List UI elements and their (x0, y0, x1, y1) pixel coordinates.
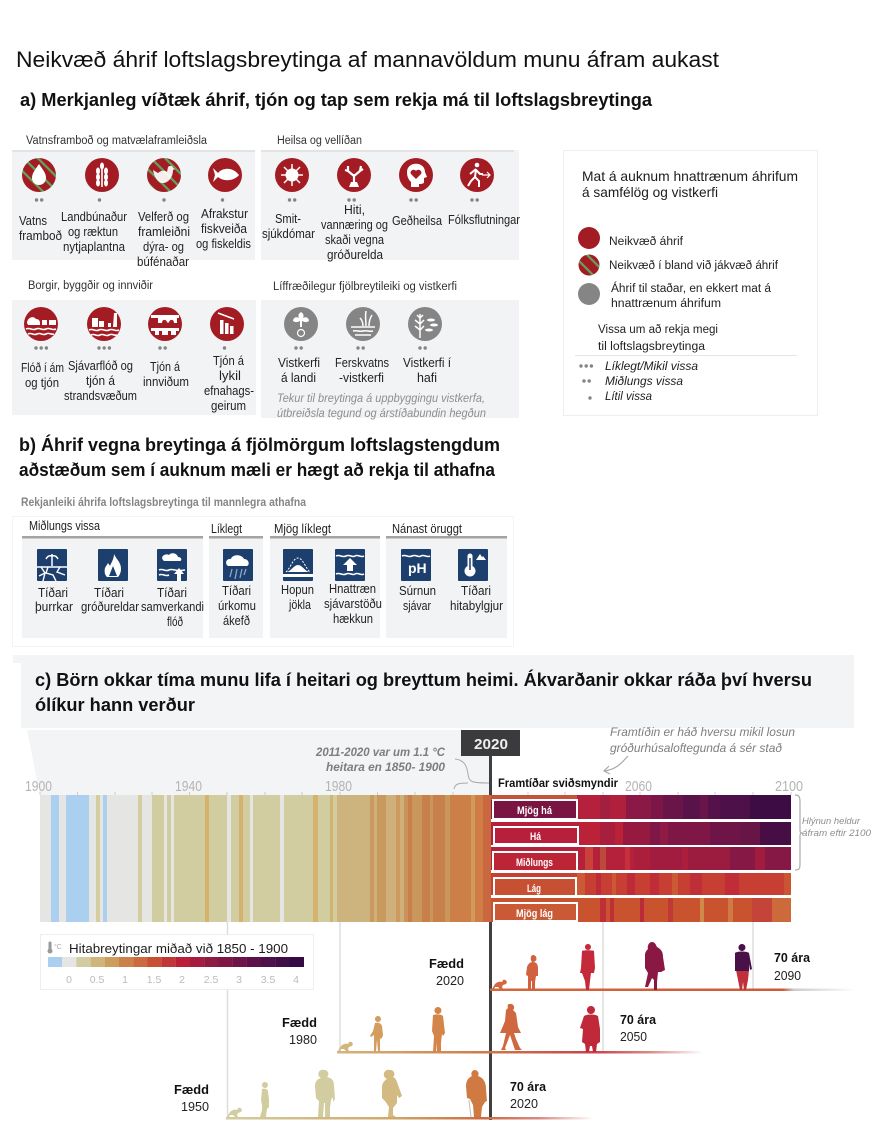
heading: water and food: Vatnsframboð og matvælaframleiðsla (26, 135, 208, 147)
item: agriculture (61, 158, 127, 254)
item: water availability: Vatns (19, 214, 47, 228)
annotation: 2011-2020 warming: heitara en 1850- 1900 (326, 760, 445, 774)
annotation: warming continues after 2100: áfram eftir 2100 (802, 828, 872, 839)
timeline: born 1980 (282, 1004, 704, 1054)
group: likely (209, 522, 263, 638)
backdrop: historical wedge (27, 730, 491, 795)
heading: biodiversity: Líffræðilegur fjölbreytileiki og vistkerfi (273, 281, 457, 293)
item: economic sectors (204, 307, 254, 413)
item: land ecosystems (278, 307, 320, 385)
group: medium confidence: Miðlungs vissa (29, 519, 100, 533)
legend: confidence heading: Vissa um að rekja megi (598, 324, 718, 336)
legend: temperature colour scale (40, 934, 314, 990)
item: infectious disease (262, 158, 315, 241)
item: infrastructure: innviðum (143, 375, 189, 389)
group: virtually certain (386, 522, 507, 638)
heading: health: Heilsa og vellíðan (277, 135, 362, 147)
scale values (66, 974, 299, 986)
annotation: future depends on emissions: gróðurhúsaloftegunda á sér stað (610, 741, 782, 755)
scale values: 1 (122, 974, 128, 986)
item: heatwaves (450, 549, 503, 613)
heading: future scenarios: Framtíðar sviðsmyndir (498, 776, 618, 790)
item: heavy rain: úrkomu (218, 599, 256, 613)
item: heat, malnutrition: gróðurelda (327, 248, 383, 262)
axis years (25, 778, 803, 795)
panel: legend of impacts (564, 150, 818, 416)
item: economic sectors: efnahags- (204, 384, 254, 398)
item: heatwaves: hitabylgjur (450, 599, 503, 613)
item: heavy rain: Tíðari (222, 584, 251, 598)
scale values: 2 (179, 974, 185, 986)
label: born 1980: 1980 (289, 1032, 317, 1047)
scenario label: high: Há (530, 831, 542, 843)
legend: confidence levels (581, 361, 698, 403)
legend title: á samfélög og vistkerfi (582, 184, 718, 200)
group: medium confidence (22, 519, 204, 638)
panel: health and wellbeing (261, 135, 520, 262)
row: intermediate (491, 847, 791, 870)
item: infectious disease: Smit- (275, 212, 301, 226)
item: mental health: Geðheilsa (392, 214, 442, 228)
people: born 1980 (338, 1004, 600, 1052)
item: freshwater ecosystems: -vistkerfi (339, 371, 384, 385)
2020 marker: 2020 (474, 736, 508, 753)
scale values: 3.5 (261, 974, 275, 986)
axis years: 1900 (25, 778, 52, 795)
item: ocean ecosystems (403, 307, 451, 385)
item: mental health (392, 158, 442, 228)
item: water availability: framboð (19, 229, 62, 243)
item: ocean ecosystems: Vistkerfi í (403, 356, 451, 370)
item: fisheries: Afrakstur (201, 207, 248, 221)
chart: future scenario stripes (491, 795, 791, 922)
legend: no assessment: hnattrænum áhrifum (611, 298, 721, 310)
item: land ecosystems: Vistkerfi (278, 356, 320, 370)
legend: mixed (578, 254, 779, 276)
label: 70 in 2020 (510, 1079, 547, 1111)
scenario label: very low: Mjög lág (516, 908, 553, 920)
note: ecosystem changes: útbreiðsla tegund og árstíðabundin hegðun (277, 406, 486, 420)
legend: negative (578, 227, 684, 249)
scale values: 2.5 (204, 974, 218, 986)
label: born 2020: Fædd (429, 956, 464, 971)
legend title: Mat á auknum hnattrænum áhrifum (582, 168, 798, 184)
annotation: future depends on emissions (604, 725, 795, 774)
label: 70 in 2050: 70 ára (620, 1012, 657, 1027)
icon: thermometer: °C (54, 943, 62, 951)
scenario label: very high: Mjög há (517, 805, 553, 817)
item: compound floods: flóð (167, 615, 183, 629)
item: droughts: þurrkar (35, 600, 73, 614)
item: river flood: og tjón (25, 376, 59, 390)
item: wildfires: Tíðari (94, 586, 124, 600)
label: born 1950 (174, 1082, 209, 1114)
item: economic sectors: geirum (211, 399, 246, 413)
item: heavy rain (218, 549, 256, 628)
item: coastal flood: Sjávarflóð og (68, 359, 133, 373)
item: river flood: Flóð í ám (21, 361, 64, 375)
panel: water and food (12, 135, 255, 269)
scenario label: high (494, 827, 578, 844)
item: animal welfare: dýra- og (143, 240, 184, 254)
panel: cities and infrastructure (12, 280, 256, 415)
note: ecosystem changes: Tekur til breytinga á uppbyggingu vistkerfa, (277, 391, 485, 405)
scenario label: low (494, 878, 576, 896)
annotation: 2011-2020 warming: 2011-2020 var um 1.1 °C (315, 745, 445, 759)
people: born 2020 (492, 942, 752, 990)
group: very likely: Mjög líklegt (274, 522, 331, 536)
group: very likely (270, 522, 382, 638)
heading: section b (19, 434, 500, 480)
title: Neikvæð áhrif loftslagsbreytinga af mannavöldum munu áfram aukast (16, 47, 719, 72)
heading: cities: Borgir, byggðir og innviðir (28, 280, 153, 292)
scenario label: intermediate (493, 852, 577, 871)
panel: biodiversity and ecosystems (261, 281, 519, 420)
item: compound floods: samverkandi (141, 600, 204, 614)
item: animal welfare: búfénaðar (137, 255, 189, 269)
item: river flood (21, 307, 64, 390)
item: droughts: Tíðari (38, 586, 68, 600)
item: ocean acidification (399, 549, 436, 613)
item: fisheries: fiskveiða (201, 222, 247, 236)
item: animal welfare (137, 158, 190, 269)
panel: section c heading: ólíkur hann verður (35, 694, 195, 715)
scenario label: intermediate: Miðlungs (516, 857, 553, 869)
label: 70 in 2050 (620, 1012, 657, 1044)
item: ocean acidification: sjávar (403, 599, 431, 613)
item: ocean acidification: Súrnun (399, 584, 436, 598)
item: migration (448, 158, 520, 227)
item: coastal flood: strandsvæðum (64, 389, 137, 403)
annotation: warming continues after 2100: Hlýnun heldur (802, 816, 861, 827)
item: ocean ecosystems: hafi (417, 371, 437, 385)
legend: confidence heading: til loftslagsbreytinga (598, 341, 706, 353)
scale values: 0.5 (90, 974, 104, 986)
scenario label: low: Lág (527, 883, 541, 895)
panel: section c heading: c) Börn okkar tíma munu lifa í heitari og breyttum heimi. Ákvarðanir okkar ráða því hversu (35, 669, 812, 690)
item: compound floods (141, 549, 204, 629)
2020 marker (461, 730, 520, 1120)
subheading: attribution: Rekjanleiki áhrifa loftslagsbreytinga til mannlegra athafna (21, 497, 307, 509)
item: droughts (35, 549, 73, 614)
row: low (491, 873, 791, 895)
group: virtually certain: Nánast öruggt (392, 522, 462, 536)
item: coastal flood: tjón á (86, 374, 115, 388)
item: wildfires (81, 549, 139, 614)
heading: section a: a) Merkjanleg víðtæk áhrif, tjón og tap sem rekja má til loftslagsbreytinga (20, 89, 653, 110)
annotation: future depends on emissions: Framtíðin er háð hversu mikil losun (610, 725, 795, 739)
legend: negative: Neikvæð áhrif (609, 236, 684, 248)
scale values: 3 (236, 974, 242, 986)
item: compound floods: Tíðari (157, 586, 187, 600)
axis years: 2100 (775, 778, 803, 795)
item: agriculture: nytjaplantna (63, 240, 125, 254)
chart: warming stripes 1900-2020 (40, 795, 491, 922)
note: ecosystem changes (277, 391, 486, 420)
annotation: warming continues after 2100 (795, 795, 872, 870)
legend: confidence levels: Lítil vissa (605, 391, 652, 403)
scenario label: very high (493, 800, 577, 819)
panel: section c heading (13, 655, 854, 728)
item: ocean acidification: pH (408, 560, 427, 576)
axis years: 2060 (625, 778, 652, 795)
item: agriculture: Landbúnaður (61, 210, 127, 224)
item: fisheries (196, 158, 251, 251)
item: glacier retreat (281, 549, 314, 612)
timeline: born 2020 (429, 942, 856, 991)
legend: confidence heading (598, 324, 718, 353)
colour bar (48, 957, 304, 967)
legend: mixed: Neikvæð í bland við jákvæð áhrif (609, 260, 779, 272)
label: 70 in 2050: 2050 (620, 1029, 647, 1044)
label: born 1980 (282, 1015, 317, 1047)
item: economic sectors: lykil (219, 369, 241, 383)
axis years: 1980 (325, 778, 352, 795)
item: coastal flood (64, 307, 137, 403)
item: agriculture: og ræktun (68, 225, 118, 239)
icon: thermometer (48, 943, 62, 954)
annotation: 2011-2020 warming (315, 745, 489, 789)
item: heat, malnutrition (321, 158, 388, 262)
item: sea level rise: Hnattræn (329, 582, 376, 596)
scale values: 1.5 (147, 974, 161, 986)
item: water availability (19, 158, 62, 243)
legend: confidence levels: Miðlungs vissa (605, 376, 683, 388)
item: sea level rise: sjávarstöðu (324, 597, 382, 611)
item: sea level rise (324, 549, 382, 626)
people: born 1950 (227, 1070, 487, 1117)
scale values: 0 (66, 974, 72, 986)
item: freshwater ecosystems (335, 307, 389, 385)
timeline: born 1950 (174, 1070, 594, 1120)
item: fisheries: og fiskeldis (196, 237, 251, 251)
item: infrastructure: Tjón á (150, 360, 180, 374)
axis years: 1940 (175, 778, 202, 795)
group: likely: Líklegt (211, 522, 242, 536)
item: freshwater ecosystems: Ferskvatns (335, 356, 389, 370)
item: glacier retreat: Hopun (281, 583, 314, 597)
item: heat, malnutrition: Hiti, (344, 203, 365, 217)
row: high (491, 822, 791, 845)
heading: section b: b) Áhrif vegna breytinga á fjölmörgum loftslagstengdum (19, 434, 500, 455)
label: 70 in 2090: 2090 (774, 968, 801, 983)
panel: attribution (12, 516, 514, 646)
row: very low (491, 898, 791, 922)
legend: no assessment (578, 282, 772, 310)
scale values: 4 (293, 974, 299, 986)
legend title (582, 168, 798, 200)
label: born 1950: Fædd (174, 1082, 209, 1097)
heading: section b: aðstæðum sem í auknum mæli er hægt að rekja til athafna (19, 459, 496, 480)
item: infectious disease: sjúkdómar (262, 227, 315, 241)
gridlines (40, 792, 791, 1118)
item: wildfires: gróðureldar (81, 600, 139, 614)
label: born 1950: 1950 (181, 1099, 209, 1114)
item: infrastructure (143, 307, 189, 389)
item: migration: Fólksflutningar (448, 213, 520, 227)
item: animal welfare: Velferð og (138, 210, 189, 224)
label: 70 in 2020: 70 ára (510, 1079, 547, 1094)
label: 70 in 2020: 2020 (510, 1096, 538, 1111)
item: heat, malnutrition: vannæring og (321, 218, 388, 232)
row: very high (491, 795, 791, 819)
legend: confidence levels: Líklegt/Mikil vissa (605, 361, 698, 373)
item: glacier retreat: jökla (288, 598, 311, 612)
item: animal welfare: framleiðni (138, 225, 190, 239)
item: heavy rain: ákefð (223, 614, 250, 628)
legend: no assessment: Áhrif til staðar, en ekkert mat á (611, 282, 772, 295)
item: heat, malnutrition: skaði vegna (325, 233, 384, 247)
item: sea level rise: hækkun (333, 612, 373, 626)
label: 70 in 2090: 70 ára (774, 950, 811, 965)
legend title: Hitabreytingar miðað við 1850 - 1900 (69, 941, 288, 956)
label: born 2020 (429, 956, 464, 988)
item: land ecosystems: á landi (281, 371, 316, 385)
item: heatwaves: Tíðari (461, 584, 491, 598)
item: economic sectors: Tjón á (213, 354, 244, 368)
label: born 2020: 2020 (436, 973, 464, 988)
label: born 1980: Fædd (282, 1015, 317, 1030)
label: 70 in 2090 (774, 950, 811, 983)
scenario label: very low (494, 903, 577, 921)
